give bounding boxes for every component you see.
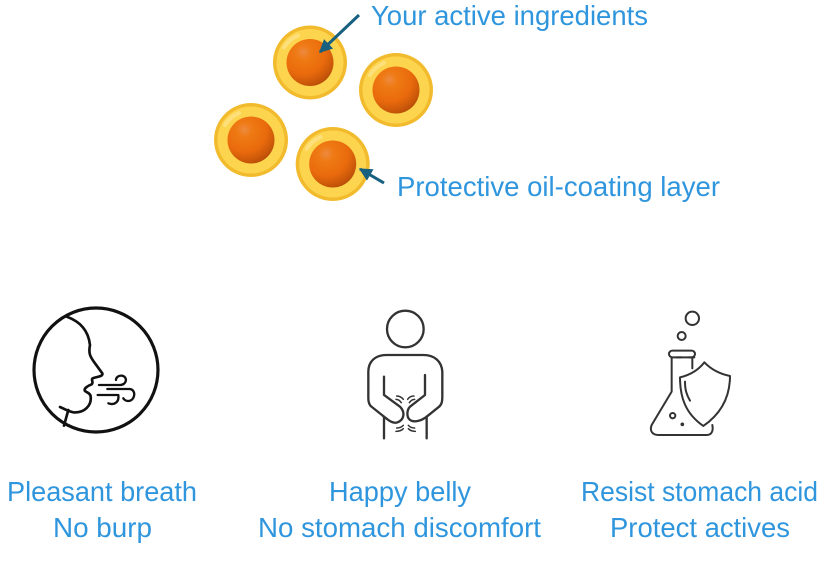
caption: breath xyxy=(7,476,197,543)
oil-coated capsules illustration xyxy=(214,26,433,201)
icon: person holding belly xyxy=(368,311,442,438)
icon: face breathing out xyxy=(34,308,158,432)
caption: breath: Pleasant breath xyxy=(7,476,197,507)
icon: flask with shield xyxy=(651,312,730,435)
caption: acid resistance: Resist stomach acid xyxy=(581,476,818,507)
caption: acid resistance xyxy=(581,476,818,543)
capsule: bottom left xyxy=(214,103,288,177)
caption: belly xyxy=(258,476,541,543)
caption: breath: No burp xyxy=(53,512,152,543)
arrow: to oil-coating layer xyxy=(360,169,384,183)
caption: belly: Happy belly xyxy=(329,476,471,507)
capsule: bottom centre xyxy=(296,127,370,201)
capsule: top right xyxy=(359,53,433,127)
arrow: to active ingredients xyxy=(320,15,359,52)
label: oil-coating layer: Protective oil-coating layer xyxy=(397,171,720,202)
capsule: top left xyxy=(273,26,347,100)
label: active ingredients: Your active ingredients xyxy=(371,0,648,31)
caption: acid resistance: Protect actives xyxy=(610,512,790,543)
caption: belly: No stomach discomfort xyxy=(258,512,541,543)
